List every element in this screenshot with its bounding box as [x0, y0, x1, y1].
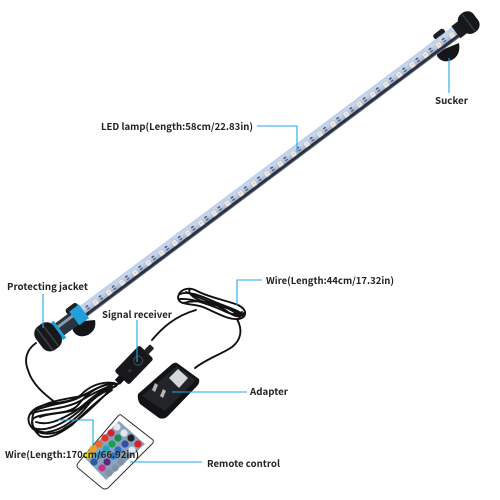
- label: protecting jacket: Protecting jacket: [7, 279, 88, 293]
- callout line: wire 170cm: [58, 420, 93, 445]
- adapter label: [169, 369, 188, 388]
- callout line: sucker: [448, 58, 450, 93]
- callout line: remote control: [130, 461, 202, 463]
- tube body: [58, 26, 461, 333]
- callout line: protecting jacket: [42, 294, 44, 328]
- LED strip: [82, 27, 460, 315]
- label: LED lamp: LED lamp(Length:58cm/22.83in): [101, 119, 253, 133]
- remote buttons: [84, 423, 142, 477]
- sucker: left: [71, 320, 95, 336]
- callout line: LED lamp: [257, 126, 297, 152]
- label: signal receiver: Signal receiver: [102, 307, 173, 321]
- end cap: right: [449, 8, 483, 41]
- label: remote control: Remote control: [207, 456, 280, 470]
- callout line: adapter: [172, 391, 247, 393]
- clip: left: [64, 302, 80, 316]
- clear section highlight: [57, 314, 74, 328]
- label: wire 170cm: Wire(Length:170cm/66.92in): [5, 447, 139, 461]
- blue ring: [69, 304, 89, 325]
- label: sucker: Sucker: [435, 93, 469, 107]
- wire to adapter and coil: [152, 289, 245, 368]
- sucker: right: [437, 43, 459, 61]
- LED lamp tube: [31, 5, 484, 355]
- label: adapter: Adapter: [249, 384, 289, 398]
- end cap: left: [31, 319, 66, 355]
- adapter prongs: [152, 383, 166, 398]
- clip: right: [432, 28, 446, 40]
- adapter: [138, 363, 199, 419]
- label: wire 44cm: Wire(Length:44cm/17.32in): [266, 273, 394, 287]
- clear end section: [55, 311, 80, 336]
- callout line: signal receiver: [136, 320, 138, 362]
- cyan end ring: [50, 321, 66, 340]
- callout line: wire 44cm: [237, 280, 262, 306]
- wire to lamp and coil: [26, 343, 118, 437]
- remote control: [77, 415, 153, 489]
- signal receiver box: [110, 339, 159, 389]
